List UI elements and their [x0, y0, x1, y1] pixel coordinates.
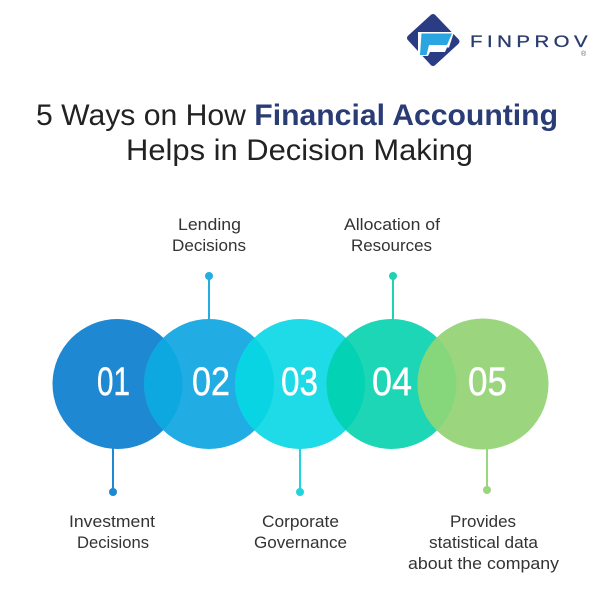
title	[36, 99, 558, 167]
circle 03	[235, 319, 365, 449]
label: Provides statistical data about the company	[408, 513, 560, 573]
label: Allocation of Resources: Allocation of	[344, 216, 440, 234]
label: Investment Decisions: Investment	[69, 513, 155, 531]
stem: item 3	[296, 445, 304, 496]
number 02: 02	[192, 360, 230, 404]
label: Lending Decisions	[172, 216, 246, 255]
number 04: 04	[372, 360, 412, 404]
circle chain	[52, 318, 548, 450]
label: Investment Decisions: Decisions	[77, 534, 149, 552]
label: Corporate Governance: Governance	[254, 534, 347, 552]
circle 02	[144, 319, 274, 449]
label: Corporate Governance	[254, 513, 347, 552]
number 01: 01	[97, 360, 130, 404]
stem: item 1	[109, 445, 117, 496]
logo: Finprov	[410, 17, 592, 63]
label: Investment Decisions	[69, 513, 155, 552]
label: Lending Decisions: Decisions	[172, 237, 246, 255]
label: Allocation of Resources: Resources	[351, 237, 432, 255]
overlap 02-03	[235, 338, 274, 430]
number 03: 03	[281, 360, 318, 404]
circle 04	[326, 319, 456, 449]
stem: item 5	[483, 445, 491, 494]
number 05: 05	[468, 360, 507, 404]
label: Provides statistical data about the company: Provides	[450, 513, 516, 531]
circle 05	[418, 318, 548, 450]
label: Provides statistical data about the company: statistical data	[429, 534, 539, 552]
overlap 01-02	[144, 338, 182, 430]
overlap 03-04	[326, 338, 365, 430]
title line 2: Helps in Decision Making	[126, 134, 473, 167]
label: Corporate Governance: Corporate	[262, 513, 339, 531]
icon: Finprov diamond	[410, 17, 456, 63]
label: Provides statistical data about the company: about the company	[408, 555, 560, 573]
label: Allocation of Resources	[344, 216, 440, 255]
stem: item 4	[389, 272, 397, 322]
circle 01	[52, 319, 182, 449]
label: Lending Decisions: Lending	[178, 216, 241, 234]
overlap 04-05	[418, 338, 456, 430]
title line 1: 5 Ways on How Financial Accounting	[36, 99, 558, 132]
logo wordmark: FINPROV	[470, 32, 592, 51]
registered mark: ®	[581, 50, 587, 58]
stem: item 2	[205, 272, 213, 322]
